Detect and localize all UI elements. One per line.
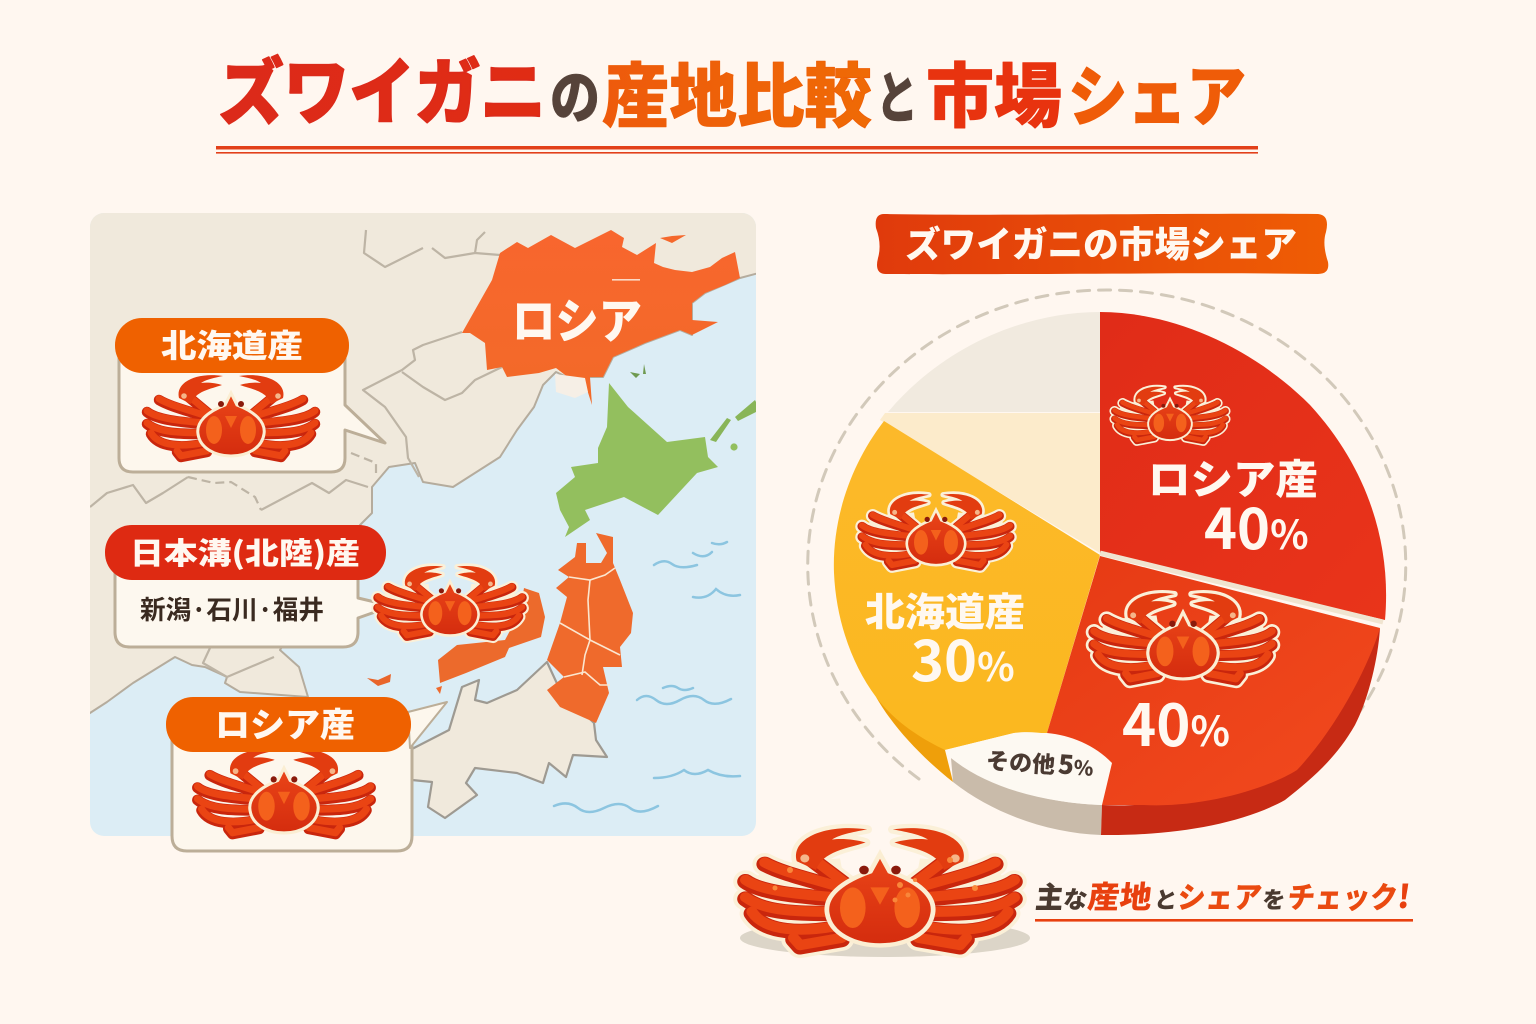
- icon: crab in orange slice: [1094, 593, 1272, 680]
- waves: [554, 542, 740, 812]
- label: Hokkaido share: 30%: [911, 617, 1015, 698]
- pill: [115, 318, 349, 373]
- tagline: シェア: [1176, 873, 1264, 917]
- pill: [166, 697, 411, 752]
- callout: Russia product: [166, 697, 447, 851]
- mainland: [80, 205, 770, 720]
- slice: other: [945, 732, 1112, 805]
- title: 市場: [926, 41, 1062, 142]
- slice: orange: [1047, 556, 1380, 805]
- icon: crab in yellow slice: [862, 494, 1010, 566]
- slice: cream: [880, 413, 1100, 553]
- label: Hokkaido share: 北海道産: [865, 582, 1025, 638]
- icon: large crab with shadow: [740, 828, 1030, 957]
- slice: Russia red: [1100, 312, 1386, 620]
- tagline: な: [1062, 880, 1089, 915]
- label: Hokkaido share: [865, 582, 1025, 698]
- Tohoku orange region: [547, 533, 633, 723]
- card: [172, 730, 412, 851]
- title: ズワイガニ: [218, 34, 546, 139]
- title: の: [550, 51, 600, 135]
- map label: Russia: ロシア: [512, 282, 642, 352]
- pie chart: [834, 312, 1386, 835]
- icon: crab in red slice: [1115, 387, 1225, 441]
- title: シェア: [1068, 44, 1246, 140]
- prefectures: 新潟·石川·福井: [140, 590, 324, 627]
- label: Russia share: 40%: [1204, 485, 1309, 566]
- label: ロシア産: [215, 698, 355, 747]
- label: 日本溝(北陸)産: [130, 529, 360, 573]
- label: Russia share: [1148, 446, 1318, 566]
- tagline: [1034, 872, 1413, 918]
- icon: crab: [197, 750, 371, 834]
- Noto orange region: [438, 588, 545, 683]
- pointer: [408, 702, 447, 748]
- label: other share: その他5%: [985, 739, 1095, 784]
- callout: Hokkaido: [115, 318, 385, 472]
- label: orange share: 40%: [1122, 679, 1230, 763]
- slice: orange side: [1101, 628, 1380, 835]
- title: と: [876, 54, 918, 135]
- slice: Hokkaido yellow side: [876, 697, 953, 782]
- title: [218, 34, 1246, 142]
- heading ribbon: market share: ズワイガニの市場シェア: [905, 216, 1297, 268]
- icon: crab: [378, 566, 522, 636]
- region borders: [90, 230, 502, 677]
- card: [119, 350, 385, 472]
- dashed ring around pie: [808, 290, 1406, 779]
- label: Russia share: ロシア産: [1148, 446, 1318, 506]
- label: 北海道産: [161, 321, 303, 367]
- pill: [105, 525, 386, 580]
- tagline: と: [1153, 881, 1179, 915]
- title: 産地比較: [602, 41, 872, 142]
- card: [115, 560, 392, 647]
- slice: Hokkaido yellow: [834, 421, 1100, 750]
- tagline: !: [1396, 872, 1413, 918]
- tagline: を: [1261, 881, 1287, 915]
- callout: Hokuriku: [105, 525, 522, 647]
- tagline: 産地: [1086, 872, 1154, 917]
- icon: crab: [147, 375, 315, 457]
- panel: map: [80, 205, 770, 840]
- Hokkaido green region: [556, 383, 718, 537]
- slice: other side: [951, 758, 1102, 835]
- Russia highlighted region: [462, 230, 740, 405]
- tagline: チェック: [1286, 873, 1400, 917]
- Honshu south land: [414, 660, 608, 820]
- tagline: 主: [1034, 873, 1066, 917]
- slice: unlabelled beige: [888, 312, 1100, 412]
